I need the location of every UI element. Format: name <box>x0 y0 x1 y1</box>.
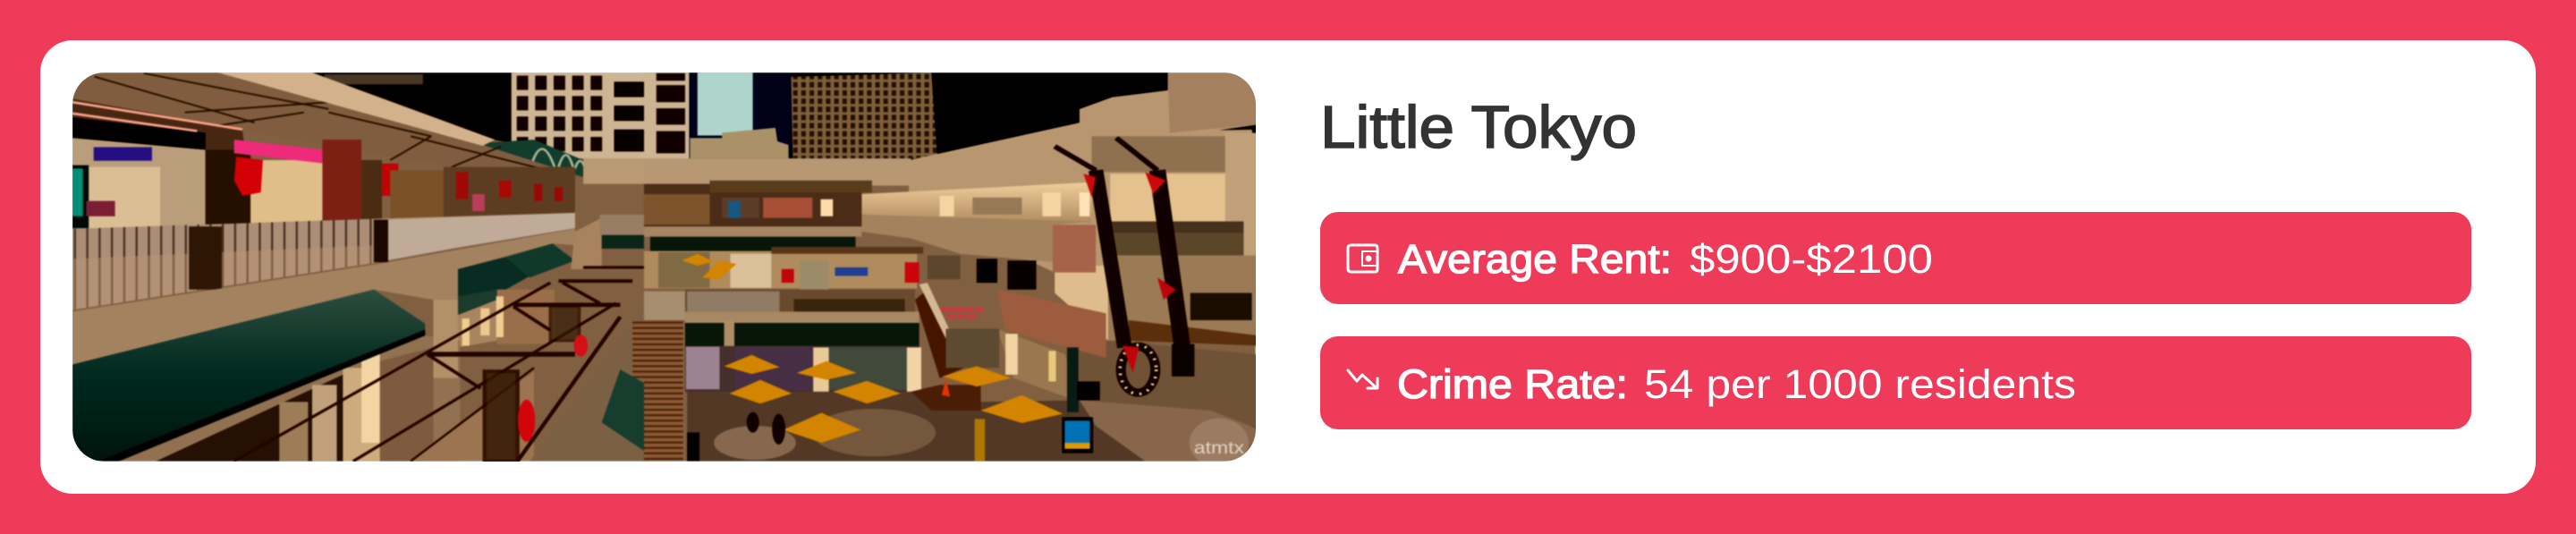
photo: Little Tokyo plaza at night: atmtx <box>1194 439 1244 458</box>
icon: trending down arrow <box>1348 370 1377 388</box>
title: Little Tokyo <box>1320 94 1637 161</box>
photo: Little Tokyo plaza at night: MARUKAI <box>941 306 984 314</box>
photo: Little Tokyo plaza at night: MARKET <box>946 313 979 320</box>
value: rent range: $900-$2100 <box>1690 236 1933 282</box>
label: crime rate: Crime Rate: <box>1397 361 1628 407</box>
info bar: average rent <box>1320 212 2471 304</box>
photo: Little Tokyo plaza at night <box>72 72 1258 467</box>
info bar: crime rate <box>1320 336 2471 429</box>
value: crime rate figure: 54 per 1000 residents <box>1644 361 2076 407</box>
icon: wallet <box>1348 245 1377 272</box>
label: average rent: Average Rent: <box>1398 236 1672 282</box>
